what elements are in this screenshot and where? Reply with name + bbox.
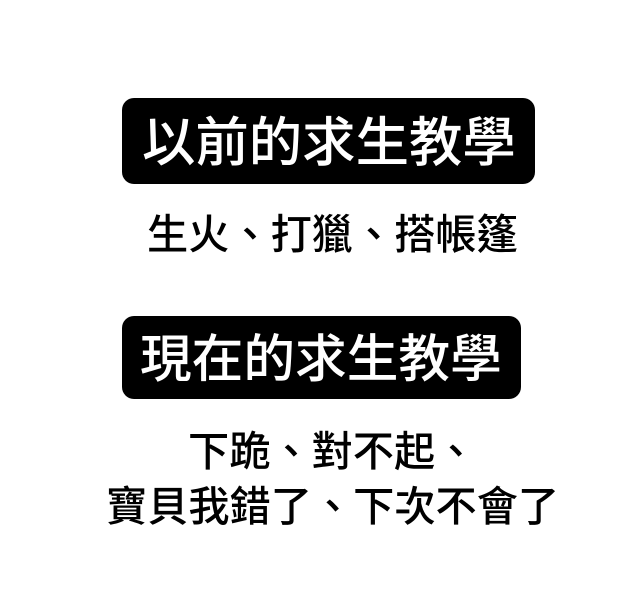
text block: present skills line 1: 下跪、對不起、	[188, 429, 476, 475]
text block: present skills line 2: 寶貝我錯了、下次不會了	[106, 484, 559, 530]
heading text: past survival teaching: 以前的求生教學	[142, 114, 516, 173]
heading badge: past survival teaching	[122, 98, 535, 184]
text block: past skills: 生火、打獵、搭帳篷	[147, 212, 518, 258]
heading text: present survival teaching: 現在的求生教學	[140, 330, 502, 388]
heading badge: present survival teaching	[122, 316, 521, 399]
